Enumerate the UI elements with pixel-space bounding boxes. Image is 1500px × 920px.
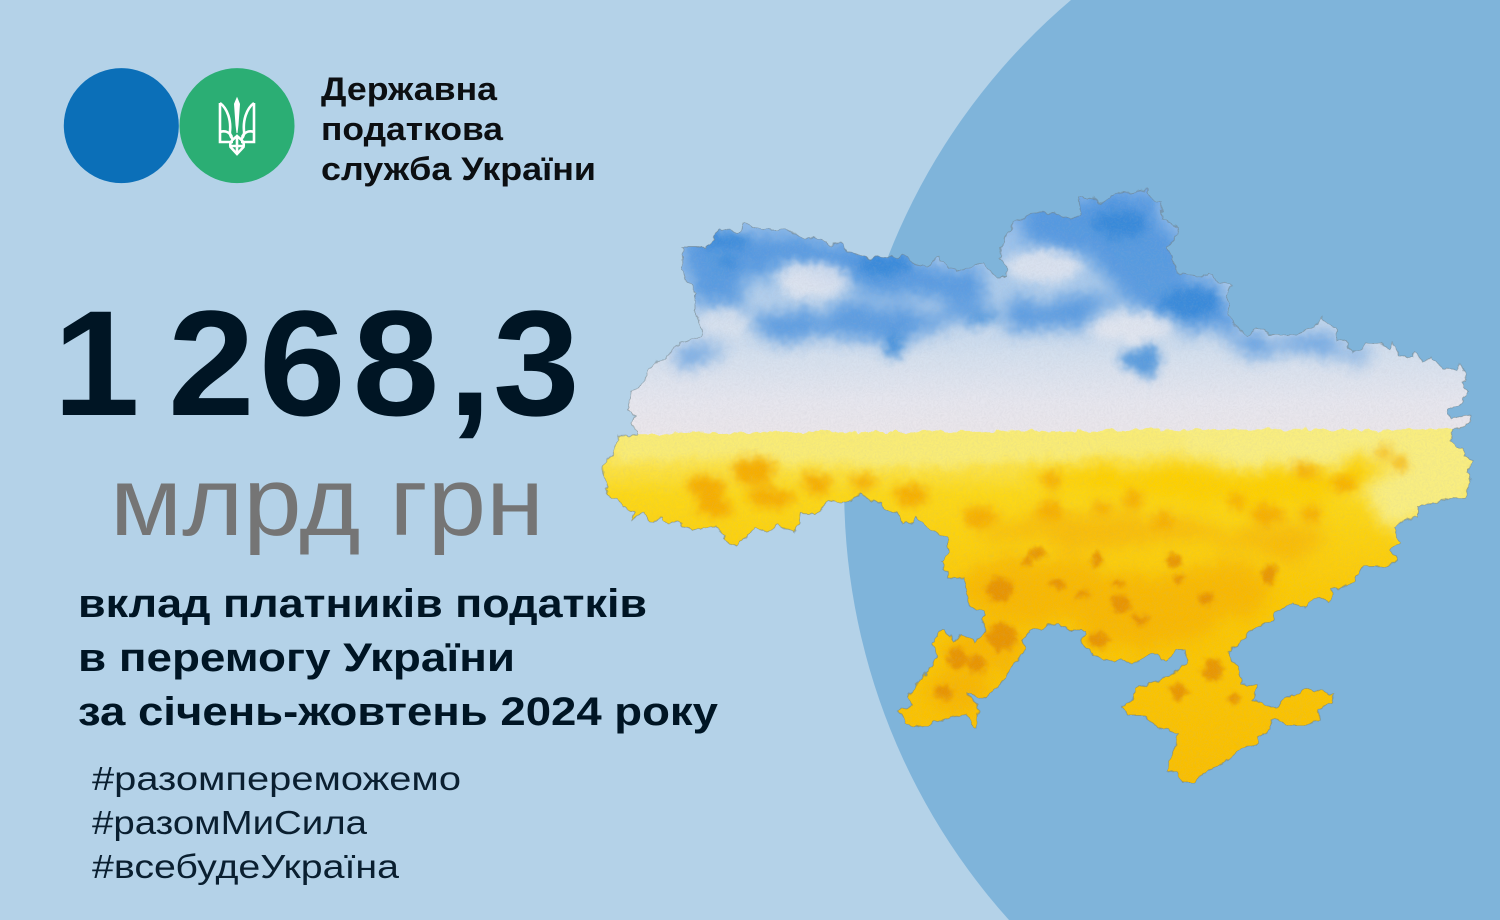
logo green circle <box>180 68 294 183</box>
logo blue circle <box>64 68 179 183</box>
logo text: податкова <box>321 111 503 147</box>
description text: вклад платників податків <box>78 582 647 626</box>
logo text <box>321 71 596 187</box>
map edge line <box>603 190 1473 783</box>
large circle backdrop <box>844 0 1500 920</box>
watercolor map of Ukraine <box>590 180 1490 800</box>
sky with clouds <box>628 188 1471 436</box>
unit label: млрд грн <box>110 447 544 556</box>
headline number: 1 268,3 <box>53 280 580 447</box>
hashtags: #всебудеУкраїна <box>92 848 400 885</box>
hashtags: #разомпереможемо <box>92 760 461 797</box>
yellow field <box>590 425 1490 795</box>
hashtags <box>92 760 461 885</box>
description text: за січень-жовтень 2024 року <box>78 690 719 734</box>
hashtags: #разомМиСила <box>92 804 368 841</box>
logo: tax service <box>64 68 596 187</box>
description text <box>78 582 719 734</box>
icon: trident <box>220 98 254 154</box>
logo text: Державна <box>321 71 497 107</box>
logo text: служба України <box>321 151 596 187</box>
paper grain <box>590 180 1490 800</box>
description text: в перемогу України <box>78 636 515 680</box>
